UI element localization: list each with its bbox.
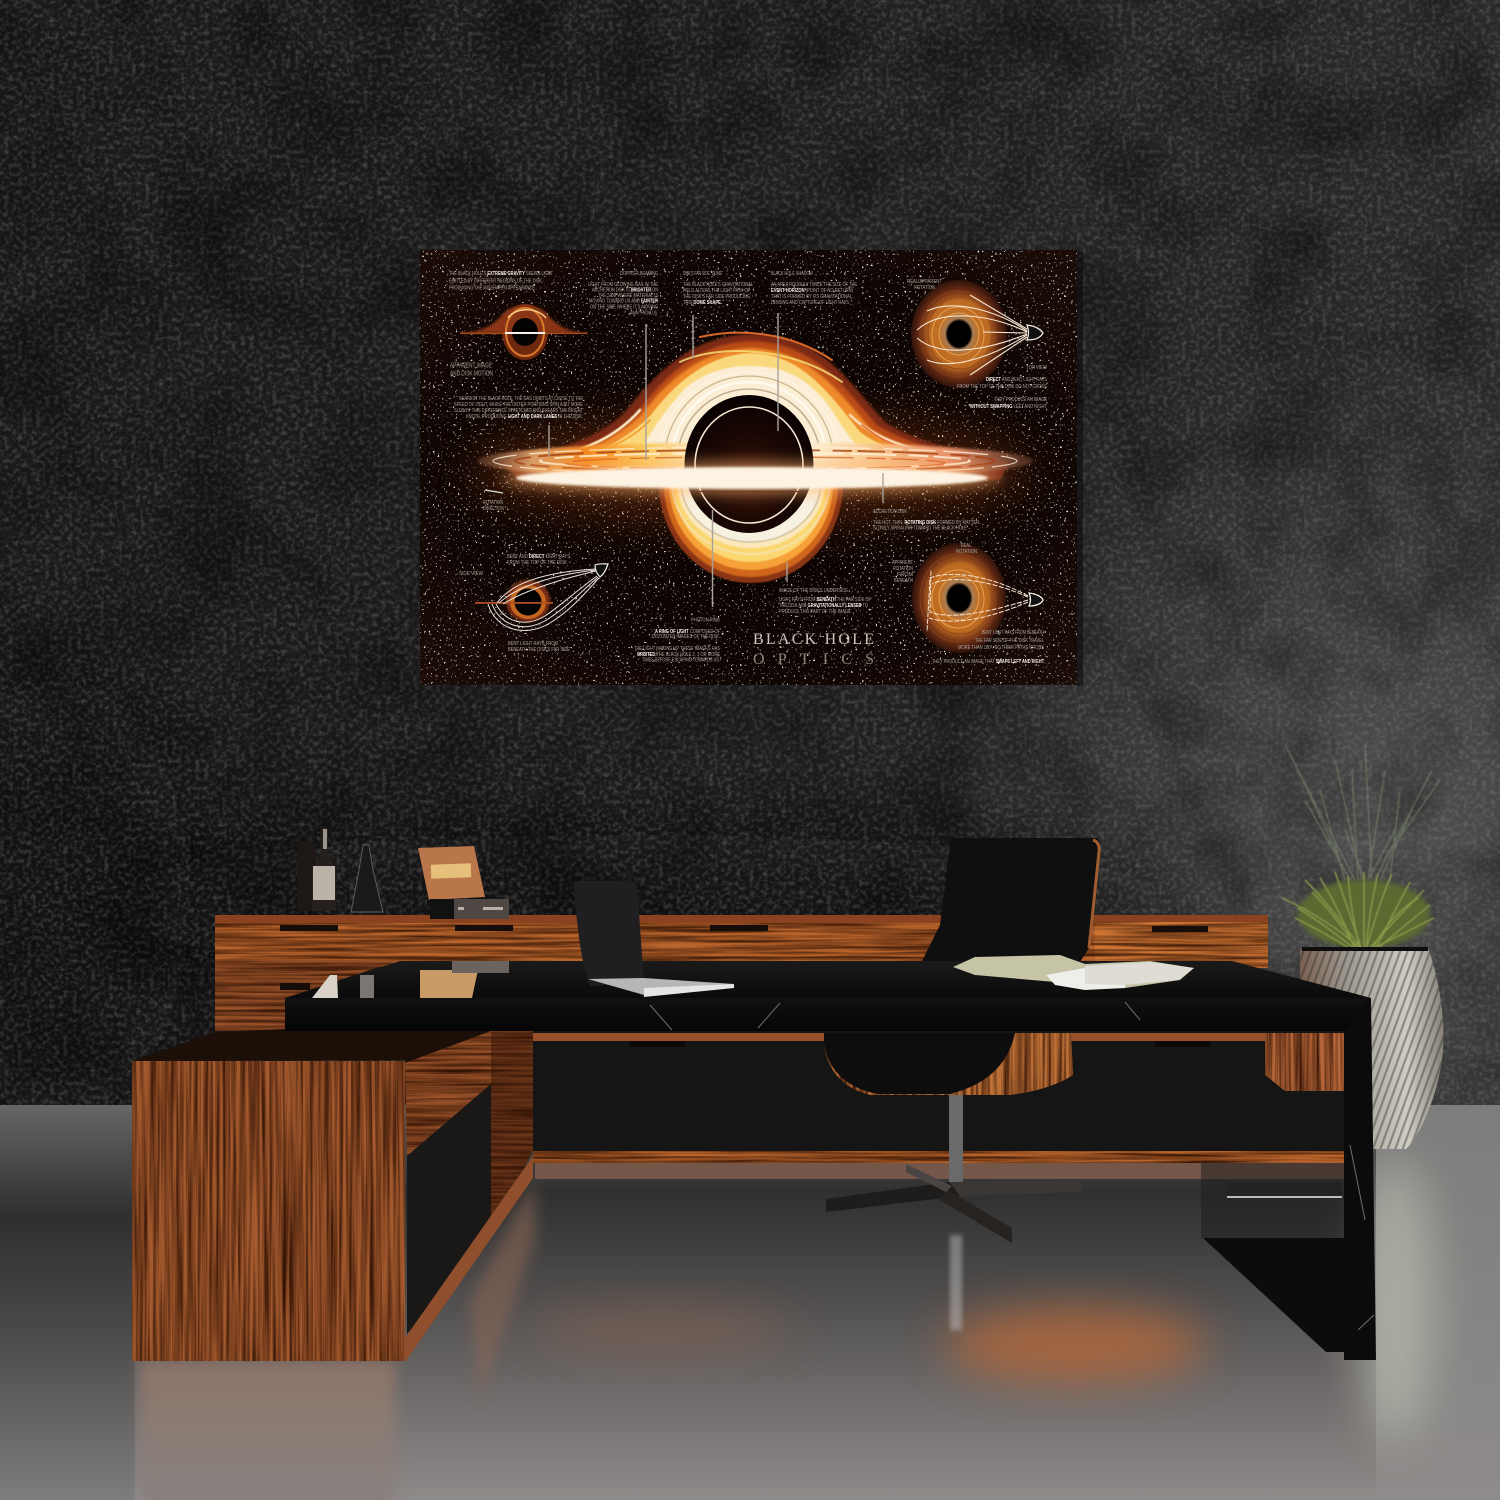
label: rotation direction: DIRECTION xyxy=(483,506,504,512)
light rays to the observer xyxy=(488,569,599,631)
desk front edge xyxy=(285,998,1371,1031)
label: real/apparent rotation: REAL/APPARENT xyxy=(907,279,942,285)
desk top surface xyxy=(285,961,1371,998)
poster: Black Hole Optics xyxy=(420,250,1083,686)
text: image of the disk's underside xyxy=(779,588,871,615)
cabinet drawers side xyxy=(405,1031,491,1156)
central black hole xyxy=(470,333,1033,583)
text: black hole shadow: THAT IS FORMED BY ITS GRAVITATIONAL xyxy=(771,294,853,300)
text: accretion disk: ACCRETION DISK xyxy=(873,509,907,515)
label: apparent rotation from beneath: ROTATION xyxy=(893,566,913,572)
text: extreme gravity: PRODUCING THE MISSHAPEN APPEARANCE. xyxy=(449,286,536,292)
label: apparent rotation from beneath: APPARENT xyxy=(892,560,913,566)
text: dome: DISK'S FAR SIDE "DOME" xyxy=(683,271,723,277)
poster title: BLACK HOLE xyxy=(753,631,874,648)
text: bent and direct rays xyxy=(507,554,570,566)
text: accretion disk: THE HOT, THIN, ROTATING DISK FORMED BY MATTER xyxy=(873,520,979,526)
diagram: apparent image xyxy=(460,304,587,360)
text: black hole shadow: LENSING AND CAPTURE OF LIGHT RAYS. xyxy=(771,300,850,306)
text: black hole shadow: AN AREA ROUGHLY TWICE THE SIZE OF THE xyxy=(771,282,857,288)
text: top view: WITHOUT SWAPPING LEFT AND RIGHT xyxy=(970,404,1047,410)
label: apparent rotation from beneath: FROM xyxy=(897,572,913,578)
text: swapped image: MORE THAN 180°, SO THEIR PATHS CROSS xyxy=(958,645,1044,651)
poster title xyxy=(753,631,874,668)
poster title: OPTICS xyxy=(753,651,874,668)
text: extreme gravity: EMITTED BY DIFFERENT REGIONS OF THE DISK, xyxy=(449,278,543,284)
text: top view: DIRECT AND BENT LIGHT RAYS xyxy=(986,377,1047,383)
photon ring xyxy=(695,407,803,523)
label: rotation direction xyxy=(483,490,504,512)
text: accretion disk xyxy=(873,509,979,532)
chair xyxy=(824,838,1100,1243)
text: photon ring xyxy=(634,618,720,664)
text: doppler beaming xyxy=(588,271,659,316)
light rays to the observer xyxy=(917,295,1027,375)
text: doppler beaming: ON THE SIDE WHERE IT'S MOVING xyxy=(590,304,658,310)
standing book xyxy=(418,846,485,900)
plant xyxy=(1282,745,1443,1149)
laptop xyxy=(574,881,734,997)
text: swapped image: THE FAR SIDE OF THE DISK TRAVEL xyxy=(975,638,1045,644)
text: doppler beaming: AWAY FROM US. xyxy=(630,310,658,316)
chair stem and base xyxy=(826,1095,1081,1243)
text: light and dark lanes: SPEED OF LIGHT, WHILE THE OUTER PORTIONS SPIN A BIT MORE xyxy=(454,402,583,408)
text: dome: THIS DOME SHAPE. xyxy=(683,300,722,306)
label: real/apparent rotation: ROTATION xyxy=(914,285,935,291)
text: doppler beaming: DOPPLER BEAMING xyxy=(620,271,658,277)
text: extreme gravity: THE BLACK HOLE'S EXTREME GRAVITY SKEWS LIGHT xyxy=(449,271,553,277)
text: dome: THE BLACK HOLE'S GRAVITATIONAL xyxy=(683,282,754,288)
text: doppler beaming: LIGHT FROM GLOWING GAS IN THE xyxy=(588,282,658,288)
box xyxy=(430,899,509,919)
text: light and dark lanes xyxy=(454,396,583,420)
front cabinet xyxy=(132,1029,533,1362)
bottle xyxy=(297,829,336,911)
text: photon ring: TIMES BEFORE ESCAPING TOWARDS US. xyxy=(642,658,720,664)
label: rotation direction: ROTATION xyxy=(483,500,503,506)
diagram: view from beneath xyxy=(912,543,1043,653)
diagram: top view xyxy=(911,280,1043,388)
text: photon ring: THE LIGHT MAKING UP THESE IMAGES HAS xyxy=(634,646,720,652)
diagram: side view xyxy=(475,564,608,631)
text: photon ring: PHOTON RING xyxy=(691,618,720,624)
label: apparent rotation from beneath xyxy=(892,560,913,584)
text: swapped image: BENT LIGHT RAYS FROM BENEATH xyxy=(982,630,1044,636)
text: bent light rays xyxy=(508,641,570,653)
disk streaks over the upper arc xyxy=(548,333,965,554)
text: top view: THEY PRODUCE AN IMAGE xyxy=(994,397,1047,403)
text: swapped image xyxy=(932,630,1045,665)
text: photon ring: ORBITED THE BLACK HOLE 2, 3 OR MORE xyxy=(637,652,720,658)
cabinet front xyxy=(132,1061,405,1361)
accretion disk xyxy=(477,442,1033,480)
text: dome: FIELD ALTERS THE LIGHT PATH OF xyxy=(683,288,750,294)
label: real rotation: REAL xyxy=(961,543,972,549)
floor xyxy=(0,1105,1500,1500)
text: bent light rays: BENT LIGHT RAYS FROM xyxy=(508,641,558,647)
under-desk back panel xyxy=(533,1031,1348,1238)
label: apparent rotation from beneath: BENEATH xyxy=(894,578,913,584)
text: light and dark lanes: NEAREST THE BLACK HOLE, THE GAS ORBITS AT CLOSE TO THE xyxy=(459,396,583,402)
text: image of the disk's underside: LIGHT RAYS FROM BENEATH THE FAR SIDE OF xyxy=(779,597,871,603)
text: top view xyxy=(957,365,1047,410)
text: top view: FROM THE TOP OF THE DISK DO NOT CROSS xyxy=(957,384,1047,390)
desk leg xyxy=(1344,998,1376,1360)
label: apparent image: APPARENT IMAGE xyxy=(450,362,492,370)
text: bent light rays: BENEATH THE DISK'S FAR SIDE xyxy=(508,647,570,653)
text: photon ring: DISTORTED IMAGES OF THE DISK. xyxy=(652,634,720,640)
text: doppler beaming: ACCRETION DISK IS BRIGHTER ON xyxy=(592,288,658,294)
starfield xyxy=(420,250,1077,685)
label: real rotation xyxy=(956,543,977,555)
desktop reflections xyxy=(312,961,509,998)
text: swapped image: THEY PRODUCE AN IMAGE THAT SWAPS LEFT AND RIGHT xyxy=(932,659,1044,665)
lower lensed image of the disk xyxy=(658,486,844,584)
label: apparent image xyxy=(450,362,493,378)
desk xyxy=(285,961,1376,1360)
text: black hole shadow: EVENT HORIZON (POINT OF NO RETURN) xyxy=(771,288,853,294)
text: black hole shadow: BLACK HOLE SHADOW xyxy=(771,271,813,277)
items on the credenza xyxy=(297,829,509,919)
open book on desk xyxy=(953,955,1194,990)
text: black hole shadow xyxy=(771,271,857,306)
text: image of the disk's underside: THE DISK ARE GRAVITATIONALLY LENSED TO xyxy=(779,603,868,609)
bright foreground band xyxy=(502,462,1002,494)
text: top view: TOP VIEW xyxy=(1026,365,1047,371)
icon: eye xyxy=(1029,593,1043,606)
text: doppler beaming: THE SIDE WHERE MATERIAL IS xyxy=(598,293,658,299)
crossing light rays xyxy=(927,570,1028,632)
background wall xyxy=(0,0,1500,1120)
text: bent and direct rays: BENT AND DIRECT LIGHT RAYS xyxy=(507,554,570,560)
text: image of the disk's underside: IMAGE OF THE DISK'S UNDERSIDE xyxy=(779,588,848,594)
chair seat xyxy=(824,1033,1073,1095)
label: real/apparent rotation xyxy=(907,279,942,291)
text: doppler beaming: MOVING TOWARD US AND FAINTER xyxy=(589,298,659,304)
label: side view: SIDE VIEW xyxy=(459,571,483,577)
book emblem xyxy=(431,863,471,879)
vase xyxy=(1300,947,1443,1149)
text: image of the disk's underside: PRODUCE THIS PART OF THE IMAGE. xyxy=(779,609,852,615)
decanter xyxy=(351,845,383,912)
credenza behind the desk xyxy=(215,915,1268,1031)
label: real rotation: ROTATION xyxy=(956,549,977,555)
icon: eye xyxy=(595,564,608,577)
text: extreme gravity xyxy=(449,271,553,292)
text: light and dark lanes: KNOTS, PRODUCING LIGHT AND DARK LANES IN THE DISK. xyxy=(466,414,583,420)
text: photon ring: A RING OF LIGHT COMPOSED OF xyxy=(655,629,720,635)
icon: eye xyxy=(1027,325,1043,340)
text: dome: THE DISK'S FAR SIDE PRODUCING xyxy=(683,294,750,300)
chair back xyxy=(920,838,1100,965)
text: dome xyxy=(683,271,754,306)
text: bent and direct rays: FROM THE TOP OF THE DISK xyxy=(507,560,567,566)
text: light and dark lanes: SLOWLY. THIS DIFFERENCE STRETCHES AND SHEARS THE BRIGHT xyxy=(454,408,583,414)
text: accretion disk: SLOWLY SPIRALING TOWARD THE BLACK HOLE xyxy=(873,526,967,532)
label: apparent image: AND DISK MOTION xyxy=(450,370,493,378)
black hole shadow xyxy=(684,395,814,533)
leader lines xyxy=(549,313,883,607)
